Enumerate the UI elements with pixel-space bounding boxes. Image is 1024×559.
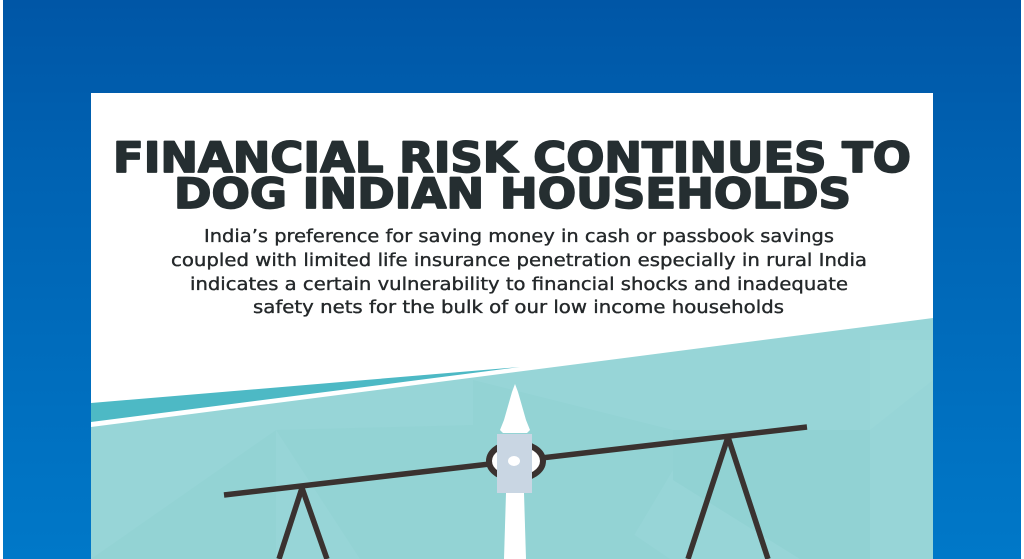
intro text block: indicates a certain vulnerability to financial shocks and inadequate: [190, 275, 848, 295]
right scale string right: [728, 437, 768, 559]
teal accent wedge: [91, 367, 520, 422]
left scale string left: [279, 488, 302, 559]
pivot ring: [489, 443, 543, 479]
spire tip: [500, 384, 530, 433]
pivot hole: [508, 456, 520, 466]
title: [113, 133, 911, 218]
intro text block: India’s preference for saving money in cash or passbook savings: [204, 227, 834, 247]
intro text block: safety nets for the bulk of our low income households: [253, 298, 784, 318]
scale beam: [224, 427, 807, 495]
pivot plate: [497, 434, 532, 493]
centre post: [504, 493, 526, 559]
right scale string left: [688, 437, 728, 559]
title: DOG INDIAN HOUSEHOLDS: [174, 169, 851, 218]
teal faceted background: [91, 318, 933, 559]
intro text block: [171, 227, 867, 318]
balance scale: [224, 384, 807, 559]
white content panel: [91, 93, 933, 559]
intro text block: coupled with limited life insurance penetration especially in rural India: [171, 251, 867, 271]
left scale string right: [302, 488, 327, 559]
title: FINANCIAL RISK CONTINUES TO: [113, 133, 911, 182]
